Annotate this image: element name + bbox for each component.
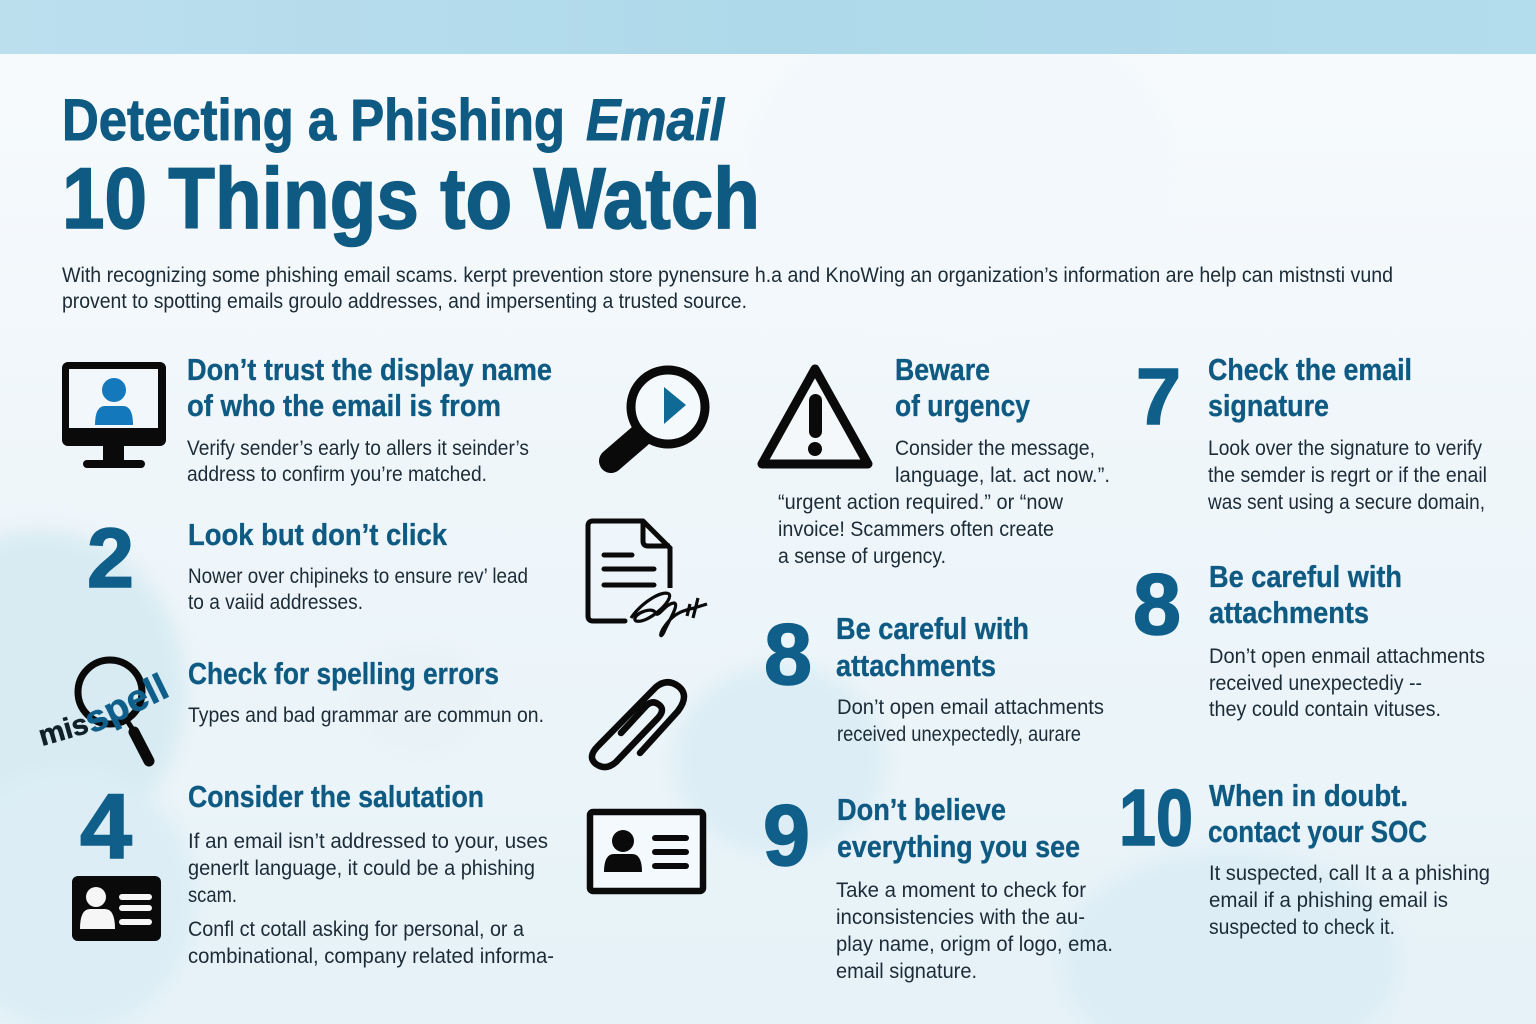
item 1: display name: Verify sender’s early to allers it seinder’s <box>187 437 529 460</box>
number 9: 9 <box>763 788 810 884</box>
icon: document with signature <box>588 521 707 636</box>
item 1: display name <box>187 352 552 486</box>
item 7: signature <box>1207 352 1487 514</box>
icon: magnifier with play <box>611 370 705 461</box>
number 2: 2 <box>87 511 134 605</box>
item 8: attachments center: received unexpectedly, aurare <box>837 723 1081 746</box>
item 2: look but don't click <box>188 517 528 614</box>
item 4: salutation: Confl ct cotall asking for personal, or a <box>188 918 524 941</box>
top band <box>0 0 1536 54</box>
item 8: attachments center: attachments <box>836 648 996 683</box>
item 8: attachments right: they could contain vituses. <box>1209 698 1441 721</box>
number 10: 10 <box>1119 773 1193 862</box>
title: 10 Things to Watch <box>62 151 760 247</box>
item 4: salutation: generlt language, it could be a phishing <box>188 857 535 880</box>
item 4: salutation: combinational, company related informa- <box>188 945 554 968</box>
icon: paperclip <box>592 682 684 767</box>
item 7: signature: Check the email <box>1208 352 1412 387</box>
icon: black id card <box>72 876 161 941</box>
item 5: urgency: Beware <box>895 352 990 387</box>
item 3: spelling errors: Check for spelling errors <box>188 656 499 691</box>
item 5: urgency: a sense of urgency. <box>778 545 946 568</box>
item 5: urgency: “urgent action required.” or “now <box>778 491 1064 514</box>
item 1: display name: Don’t trust the display name <box>187 352 552 387</box>
item 4: salutation: If an email isn’t addressed to your, uses <box>188 830 548 853</box>
item 10: contact SOC <box>1208 778 1490 939</box>
item 7: signature: was sent using a secure domain, <box>1207 491 1485 514</box>
icon: misspell magnifier: mis <box>35 708 92 753</box>
item 9: don't believe: inconsistencies with the au- <box>836 906 1085 929</box>
item 10: contact SOC: contact your SOC <box>1208 814 1427 849</box>
item 5: urgency: invoice! Scammers often create <box>778 518 1054 541</box>
item 9: don't believe: Don’t believe <box>837 792 1006 827</box>
item 9: don't believe: email signature. <box>836 960 977 983</box>
item 9: don't believe: Take a moment to check for <box>836 879 1086 902</box>
item 8: attachments right: received unexpectediy -- <box>1209 672 1422 695</box>
intro text: With recognizing some phishing email scams. kerpt prevention store pynensure h.a and KnoWing an organization’s information are help can mistnsti vund <box>62 264 1393 287</box>
item 9: don't believe <box>836 792 1113 983</box>
intro text: provent to spotting emails groulo addresses, and impersenting a trusted source. <box>62 290 747 313</box>
icon: misspell magnifier: spell <box>78 666 175 741</box>
icon: warning triangle <box>762 369 868 464</box>
number 7: 7 <box>1136 352 1181 441</box>
intro text <box>62 264 1393 313</box>
item 2: look but don't click: Look but don’t click <box>188 517 448 552</box>
item 2: look but don't click: Nower over chipineks to ensure rev’ lead <box>188 565 528 588</box>
item 3: spelling errors <box>188 656 544 727</box>
item 5: urgency: language, lat. act now.”. <box>895 464 1110 487</box>
item 10: contact SOC: When in doubt. <box>1209 778 1408 813</box>
item 1: display name: of who the email is from <box>187 388 501 423</box>
item 10: contact SOC: email if a phishing email is <box>1209 889 1448 912</box>
item 9: don't believe: play name, origm of logo, ema. <box>836 933 1113 956</box>
item 8: attachments right: Don’t open enmail attachments <box>1209 645 1485 668</box>
item 4: salutation <box>188 779 554 968</box>
item 4: salutation: Consider the salutation <box>188 779 484 814</box>
item 5: urgency <box>778 352 1110 568</box>
icon: monitor <box>62 362 166 468</box>
item 8: attachments center: Be careful with <box>836 611 1029 646</box>
item 10: contact SOC: suspected to check it. <box>1209 916 1395 939</box>
item 8: attachments right: Be careful with <box>1209 559 1402 594</box>
item 5: urgency: Consider the message, <box>895 437 1095 460</box>
title: Email <box>586 88 726 153</box>
icon: misspell magnifier <box>35 660 175 761</box>
item 7: signature: Look over the signature to verify <box>1208 437 1482 460</box>
title: Detecting a Phishing <box>62 88 565 153</box>
number 8 right: 8 <box>1133 557 1181 653</box>
item 7: signature: signature <box>1208 388 1329 423</box>
title <box>62 88 760 247</box>
item 9: don't believe: everything you see <box>837 829 1080 864</box>
item 8: attachments right <box>1209 559 1485 721</box>
item 7: signature: the semder is regrt or if the enail <box>1208 464 1487 487</box>
item 5: urgency: of urgency <box>895 388 1031 423</box>
item 8: attachments center: Don’t open email attachments <box>837 696 1104 719</box>
icon: outlined id card <box>590 812 703 891</box>
number 4: 4 <box>80 776 132 878</box>
item 3: spelling errors: Types and bad grammar are commun on. <box>188 704 544 727</box>
number 8 center: 8 <box>764 607 812 703</box>
item 4: salutation: scam. <box>188 884 237 907</box>
item 1: display name: address to confirm you’re matched. <box>187 463 487 486</box>
item 8: attachments right: attachments <box>1209 595 1369 630</box>
item 8: attachments center <box>836 611 1104 746</box>
item 10: contact SOC: It suspected, call It a a phishing <box>1209 862 1490 885</box>
item 2: look but don't click: to a vaiid addresses. <box>188 591 363 614</box>
